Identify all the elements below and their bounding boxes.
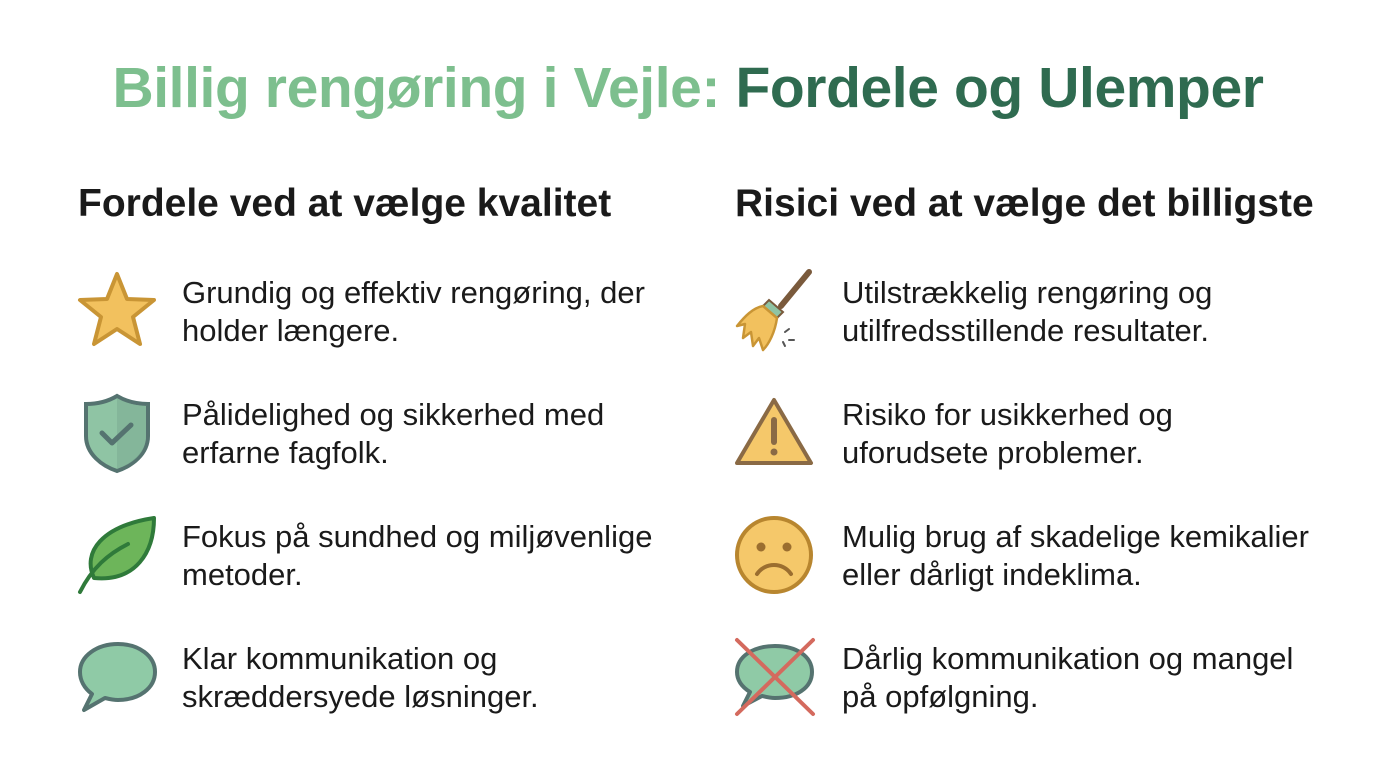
icon: star (78, 272, 156, 346)
icon: sad face (735, 516, 813, 594)
icon: shield (84, 394, 150, 474)
heading: fordele: Fordele ved at vælge kvalitet (78, 182, 611, 225)
icon: warning (735, 398, 814, 465)
text: item 4 right: Dårlig kommunikation og mangel på opfølgning. (842, 641, 1293, 714)
icon: leaf (78, 516, 156, 594)
icon: speech bubble (78, 642, 157, 712)
text: item 1 left: Grundig og effektiv rengøring, der holder længere. (182, 275, 645, 348)
text: item 4 left: Klar kommunikation og skræddersyede løsninger. (182, 641, 539, 714)
heading: risici: Risici ved at vælge det billigste (735, 182, 1314, 225)
text: item 3 right: Mulig brug af skadelige kemikalier eller dårligt indeklima. (842, 519, 1309, 592)
text: item 2 right: Risiko for usikkerhed og uforudsete problemer. (842, 397, 1173, 470)
icon: broom (736, 269, 812, 352)
icon: crossed speech bubble (734, 638, 816, 716)
title: Billig rengøring i Vejle: Fordele og Ulemper (112, 56, 1264, 120)
text: item 2 left: Pålidelighed og sikkerhed med erfarne fagfolk. (182, 397, 604, 470)
text: item 3 left: Fokus på sundhed og miljøvenlige metoder. (182, 519, 652, 592)
text: item 1 right: Utilstrækkelig rengøring og utilfredsstillende resultater. (842, 275, 1212, 348)
